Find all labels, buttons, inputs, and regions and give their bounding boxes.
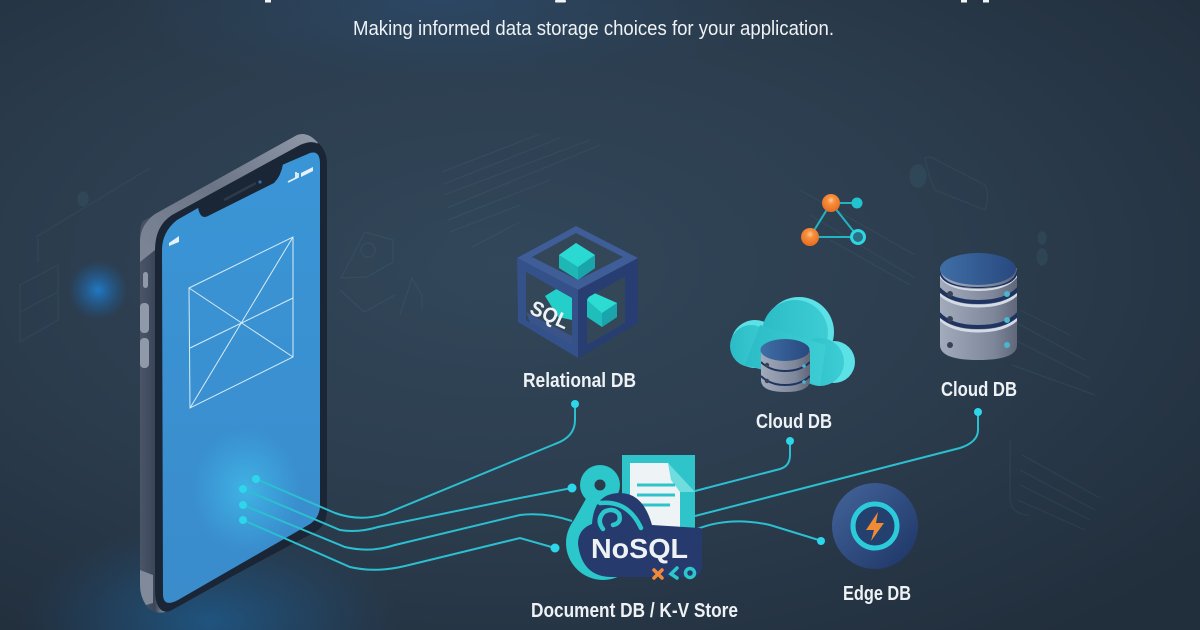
label: Relational DB: Relational DB xyxy=(523,370,636,392)
teal swirl arc xyxy=(566,465,640,580)
phone notch xyxy=(198,164,283,217)
phone metal frame xyxy=(140,134,327,613)
icon: graph network xyxy=(801,194,864,246)
cloud light back face xyxy=(731,297,855,383)
side buttons xyxy=(143,272,148,288)
cloud front face xyxy=(730,300,844,386)
mini database xyxy=(760,339,810,392)
label: Cloud DB (centre): Cloud DB xyxy=(756,411,832,433)
subtitle: Making informed data storage choices for your application. xyxy=(353,18,834,40)
phone screen xyxy=(162,152,320,603)
icon: relational SQL cube xyxy=(517,226,638,358)
title fragments cropped by top edge xyxy=(265,0,989,2)
faint background circuit decoration xyxy=(20,134,1100,530)
label: Cloud DB (right): Cloud DB xyxy=(941,379,1017,401)
tiny glyph marks xyxy=(654,568,694,578)
icon: edge bolt xyxy=(832,483,918,569)
cube frame xyxy=(517,226,638,290)
SQL badge text: SQL xyxy=(526,297,572,334)
icon: database stack xyxy=(938,253,1019,360)
screen wireframe xyxy=(189,237,293,408)
phone bezel xyxy=(155,142,327,612)
NoSQL wordmark: NoSQL xyxy=(591,533,688,564)
smartphone xyxy=(140,134,327,613)
label: Edge DB: Edge DB xyxy=(843,583,911,605)
document xyxy=(622,455,695,532)
icon: NoSQL document cloud xyxy=(566,455,702,580)
connector lines xyxy=(239,400,982,570)
icon: cloud with database xyxy=(730,297,855,392)
navy cloud xyxy=(578,493,702,577)
teal cubes xyxy=(559,243,595,280)
status icons xyxy=(288,172,298,182)
label: Document DB / K-V Store: Document DB / K-V Store xyxy=(531,600,738,622)
